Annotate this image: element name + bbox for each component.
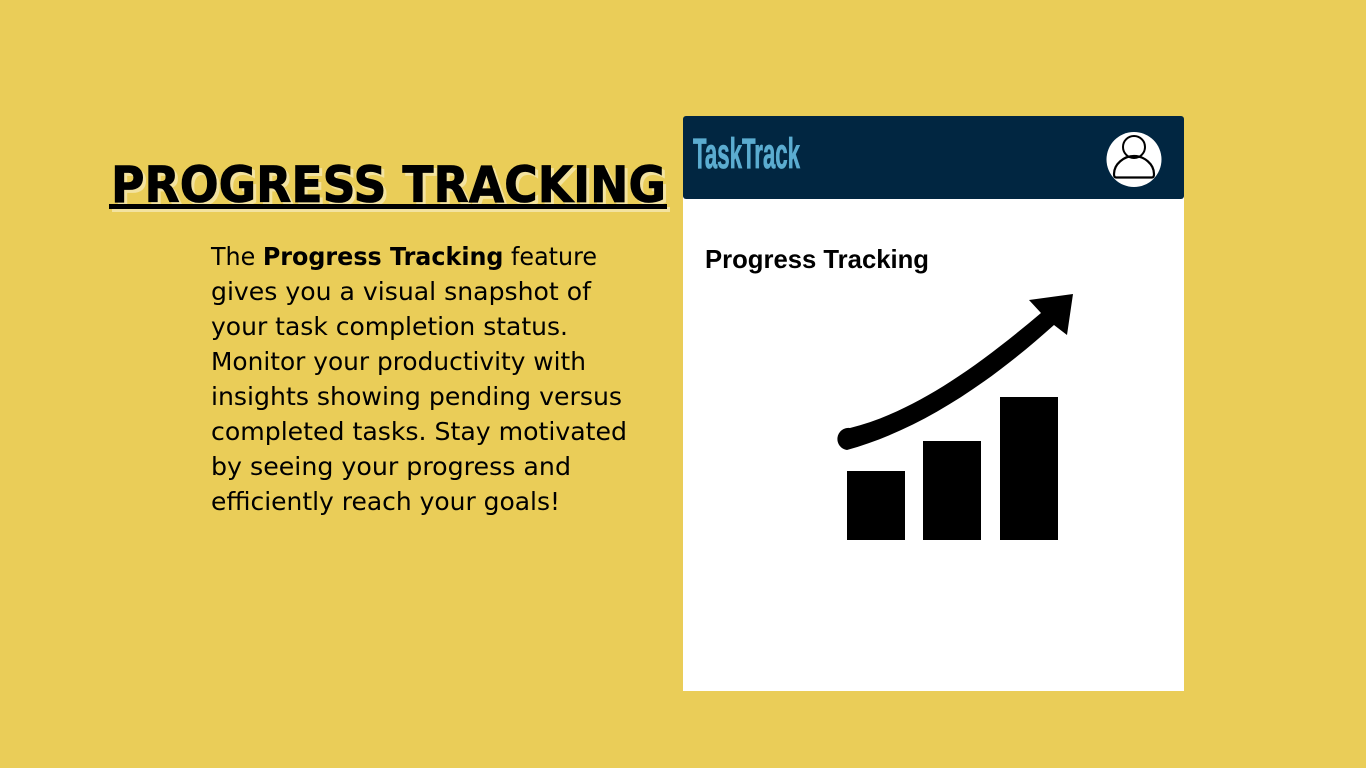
logo: TaskTrack: TaskTrack <box>693 130 800 178</box>
bar 3 <box>1000 397 1058 540</box>
chart: rising bars with arrow <box>837 294 1073 540</box>
text block: description: by seeing your progress and <box>211 452 571 481</box>
text block: description: Monitor your productivity with <box>211 347 586 376</box>
bar 2 <box>923 441 981 540</box>
heading: PROGRESS TRACKING <box>114 159 669 217</box>
bar 1 <box>847 471 905 540</box>
text block: description: efficiently reach your goals! <box>211 487 560 516</box>
text block: description: gives you a visual snapshot of <box>211 277 592 306</box>
panel: app mockup <box>683 116 1184 691</box>
text block: description <box>210 242 627 516</box>
panel heading: Progress Tracking <box>705 244 929 274</box>
arrow: upward trend <box>837 294 1073 450</box>
icon: user avatar <box>1106 132 1162 187</box>
heading: PROGRESS TRACKING <box>111 156 666 214</box>
text block: description: insights showing pending versus <box>211 382 622 411</box>
text block: description: your task completion status. <box>211 312 568 341</box>
text block: description: The Progress Tracking feature <box>210 242 597 271</box>
app header bar <box>683 116 1184 199</box>
text block: description: completed tasks. Stay motivated <box>211 417 627 446</box>
